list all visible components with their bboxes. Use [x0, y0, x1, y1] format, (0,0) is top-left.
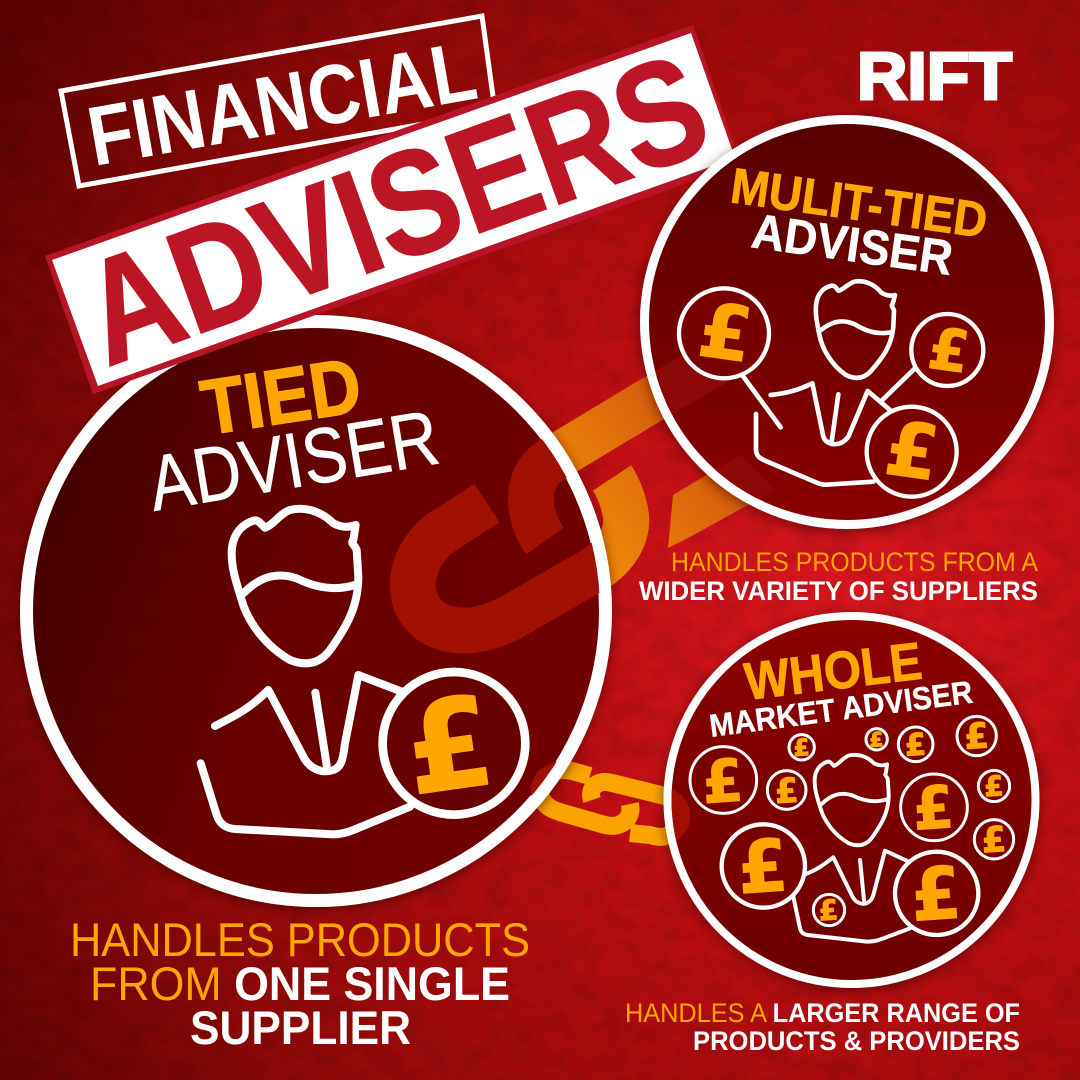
- heading: whole market adviser: [707, 632, 975, 744]
- heading: tied adviser: [142, 341, 445, 528]
- heading: mulit-tied adviser: [727, 157, 991, 286]
- caption: tied adviser: [70, 913, 530, 1054]
- icon: adviser surrounded by pound coins: £: [869, 728, 884, 752]
- heading: mulit-tied adviser: ADVISER: [748, 204, 956, 286]
- panel: multi-tied adviser: [632, 110, 1062, 540]
- caption: tied adviser: FROM ONE SINGLE: [90, 957, 510, 1010]
- heading: tied adviser: TIED: [195, 341, 367, 452]
- caption: tied adviser: SUPPLIER: [190, 1001, 411, 1054]
- icon: adviser surrounded by pound coins: £: [963, 716, 990, 758]
- icon: adviser with one pound coin: £: [397, 670, 502, 824]
- icon: adviser surrounded by pound coins: £: [908, 850, 964, 938]
- panel: tied adviser: [26, 322, 651, 900]
- icon: adviser surrounded by pound coins: £: [904, 727, 927, 764]
- icon: adviser surrounded by pound coins: £: [700, 746, 745, 817]
- caption: multi-tied adviser: [639, 547, 1038, 606]
- icon: adviser surrounded by pound coins: £: [818, 895, 839, 927]
- icon: adviser surrounded by pound coins: £: [983, 771, 1004, 803]
- icon: adviser surrounded by pound coins: £: [911, 773, 956, 844]
- icon: adviser with three pound coins: £: [693, 285, 757, 380]
- icon: adviser surrounded by pound coins: £: [980, 820, 1007, 861]
- caption: tied adviser: HANDLES PRODUCTS: [70, 913, 530, 966]
- icon: adviser surrounded by pound coins: £: [774, 771, 799, 811]
- icon: adviser surrounded by pound coins: £: [735, 823, 790, 910]
- panel: whole market adviser: [650, 616, 1036, 984]
- heading: tied adviser: ADVISER: [142, 393, 445, 528]
- caption: multi-tied adviser: WIDER VARIETY OF SUPPLIERS: [639, 576, 1038, 606]
- caption: whole market adviser: PRODUCTS & PROVIDERS: [693, 1026, 1020, 1056]
- heading: whole market adviser: WHOLE: [741, 632, 925, 712]
- icon: adviser with three pound coins: £: [880, 404, 944, 498]
- logo: rift: RIFT: [857, 39, 1012, 114]
- heading: mulit-tied adviser: MULIT-TIED: [727, 157, 991, 249]
- caption: whole market adviser: HANDLES A LARGER RANGE OF: [625, 998, 1020, 1028]
- icon: adviser with three pound coins: [679, 277, 983, 498]
- icon: adviser surrounded by pound coins: £: [793, 735, 810, 762]
- chain link ghost in whole market circle: [672, 788, 690, 841]
- icon: adviser with three pound coins: £: [924, 315, 973, 387]
- large chain link behind circles: [413, 360, 775, 631]
- caption: whole market adviser: [625, 998, 1020, 1056]
- heading: whole market adviser: MARKET ADVISER: [707, 674, 975, 744]
- icon: adviser surrounded by pound coins: [690, 716, 1014, 942]
- icon: adviser with one pound coin: [201, 509, 525, 834]
- small chain link: [540, 770, 682, 837]
- chain link ghost in multi-tied circle: [655, 356, 762, 499]
- chain link inside tied circle: [390, 439, 600, 796]
- caption: multi-tied adviser: HANDLES PRODUCTS FROM A: [671, 547, 1038, 577]
- heading banner: financial: FINANCIAL: [81, 23, 483, 184]
